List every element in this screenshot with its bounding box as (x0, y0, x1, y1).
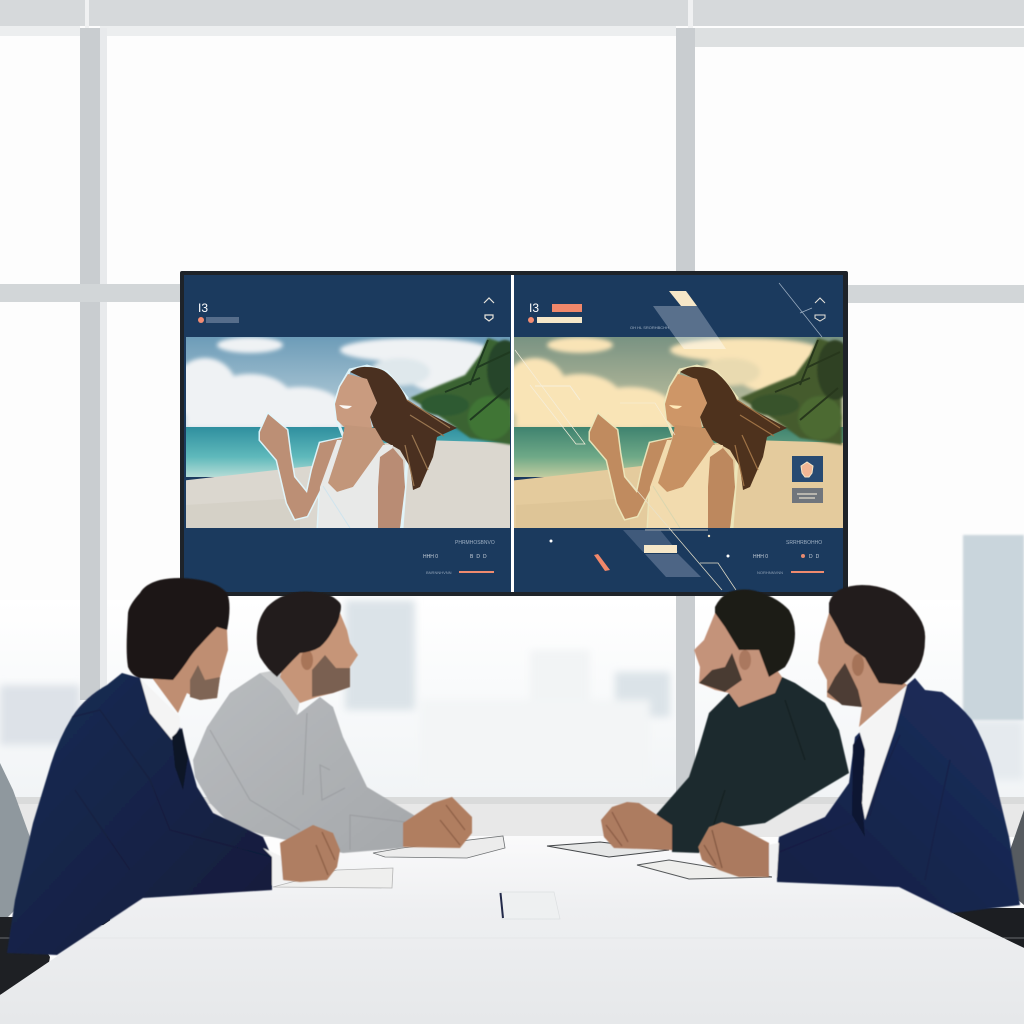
wall monitor (170, 271, 853, 596)
translucent parallelograms top (653, 291, 726, 349)
panel: original image (170, 275, 523, 592)
person: man in grey shirt (193, 592, 472, 853)
icons and line overlay (515, 283, 825, 590)
head (280, 613, 358, 703)
header label right (528, 301, 582, 323)
translucent parallelograms bottom (550, 530, 730, 577)
footer captions right: SRRHRBOHHO (786, 540, 822, 546)
header label right: I3 (529, 301, 539, 315)
jacket (7, 673, 272, 955)
footer captions right: DD (809, 554, 822, 560)
shirt and tie (140, 678, 180, 740)
hazy city skyline (0, 535, 1024, 800)
conference table (0, 836, 1024, 1024)
head (818, 613, 907, 727)
cuff and hand (263, 848, 283, 885)
footer captions left (423, 540, 495, 575)
photo: beach original (170, 337, 523, 530)
chairs (0, 763, 1024, 995)
footer captions right: HHH 0 (753, 554, 768, 560)
cuff and hand (767, 843, 779, 877)
footer captions left: PHRMHOSBNVO (455, 540, 495, 546)
footer captions left: HHH 0 (423, 554, 438, 560)
person: man in navy suit left (7, 578, 340, 955)
notepads (273, 836, 772, 888)
footer captions right (753, 540, 824, 575)
footer captions right: NORHNNVNN (757, 570, 783, 575)
shirt and tie (859, 685, 907, 820)
icons: chevron and shield (484, 298, 494, 321)
grey shirt (193, 673, 417, 853)
header label left: I3 (198, 301, 208, 315)
table seam (0, 937, 1024, 939)
head (694, 613, 782, 707)
header label left (198, 301, 239, 323)
photo: beach warm graded (500, 337, 853, 530)
head (150, 620, 228, 713)
person: man in dark sweater (601, 590, 849, 853)
footer captions left: BNRNNHVNN (426, 570, 452, 575)
person: man in navy suit right (698, 585, 1020, 913)
jacket (777, 678, 1020, 913)
sweater (654, 677, 849, 853)
badge: caption (792, 488, 823, 503)
hand (403, 797, 472, 848)
panel: enhanced image: OH HL SRORHBCHH (630, 325, 669, 330)
panel: enhanced image (500, 275, 853, 592)
footer captions left: BDD (470, 554, 490, 560)
divider (511, 275, 514, 592)
hand (601, 802, 672, 850)
badge: crown icon (792, 456, 823, 482)
table cable port (500, 892, 560, 919)
